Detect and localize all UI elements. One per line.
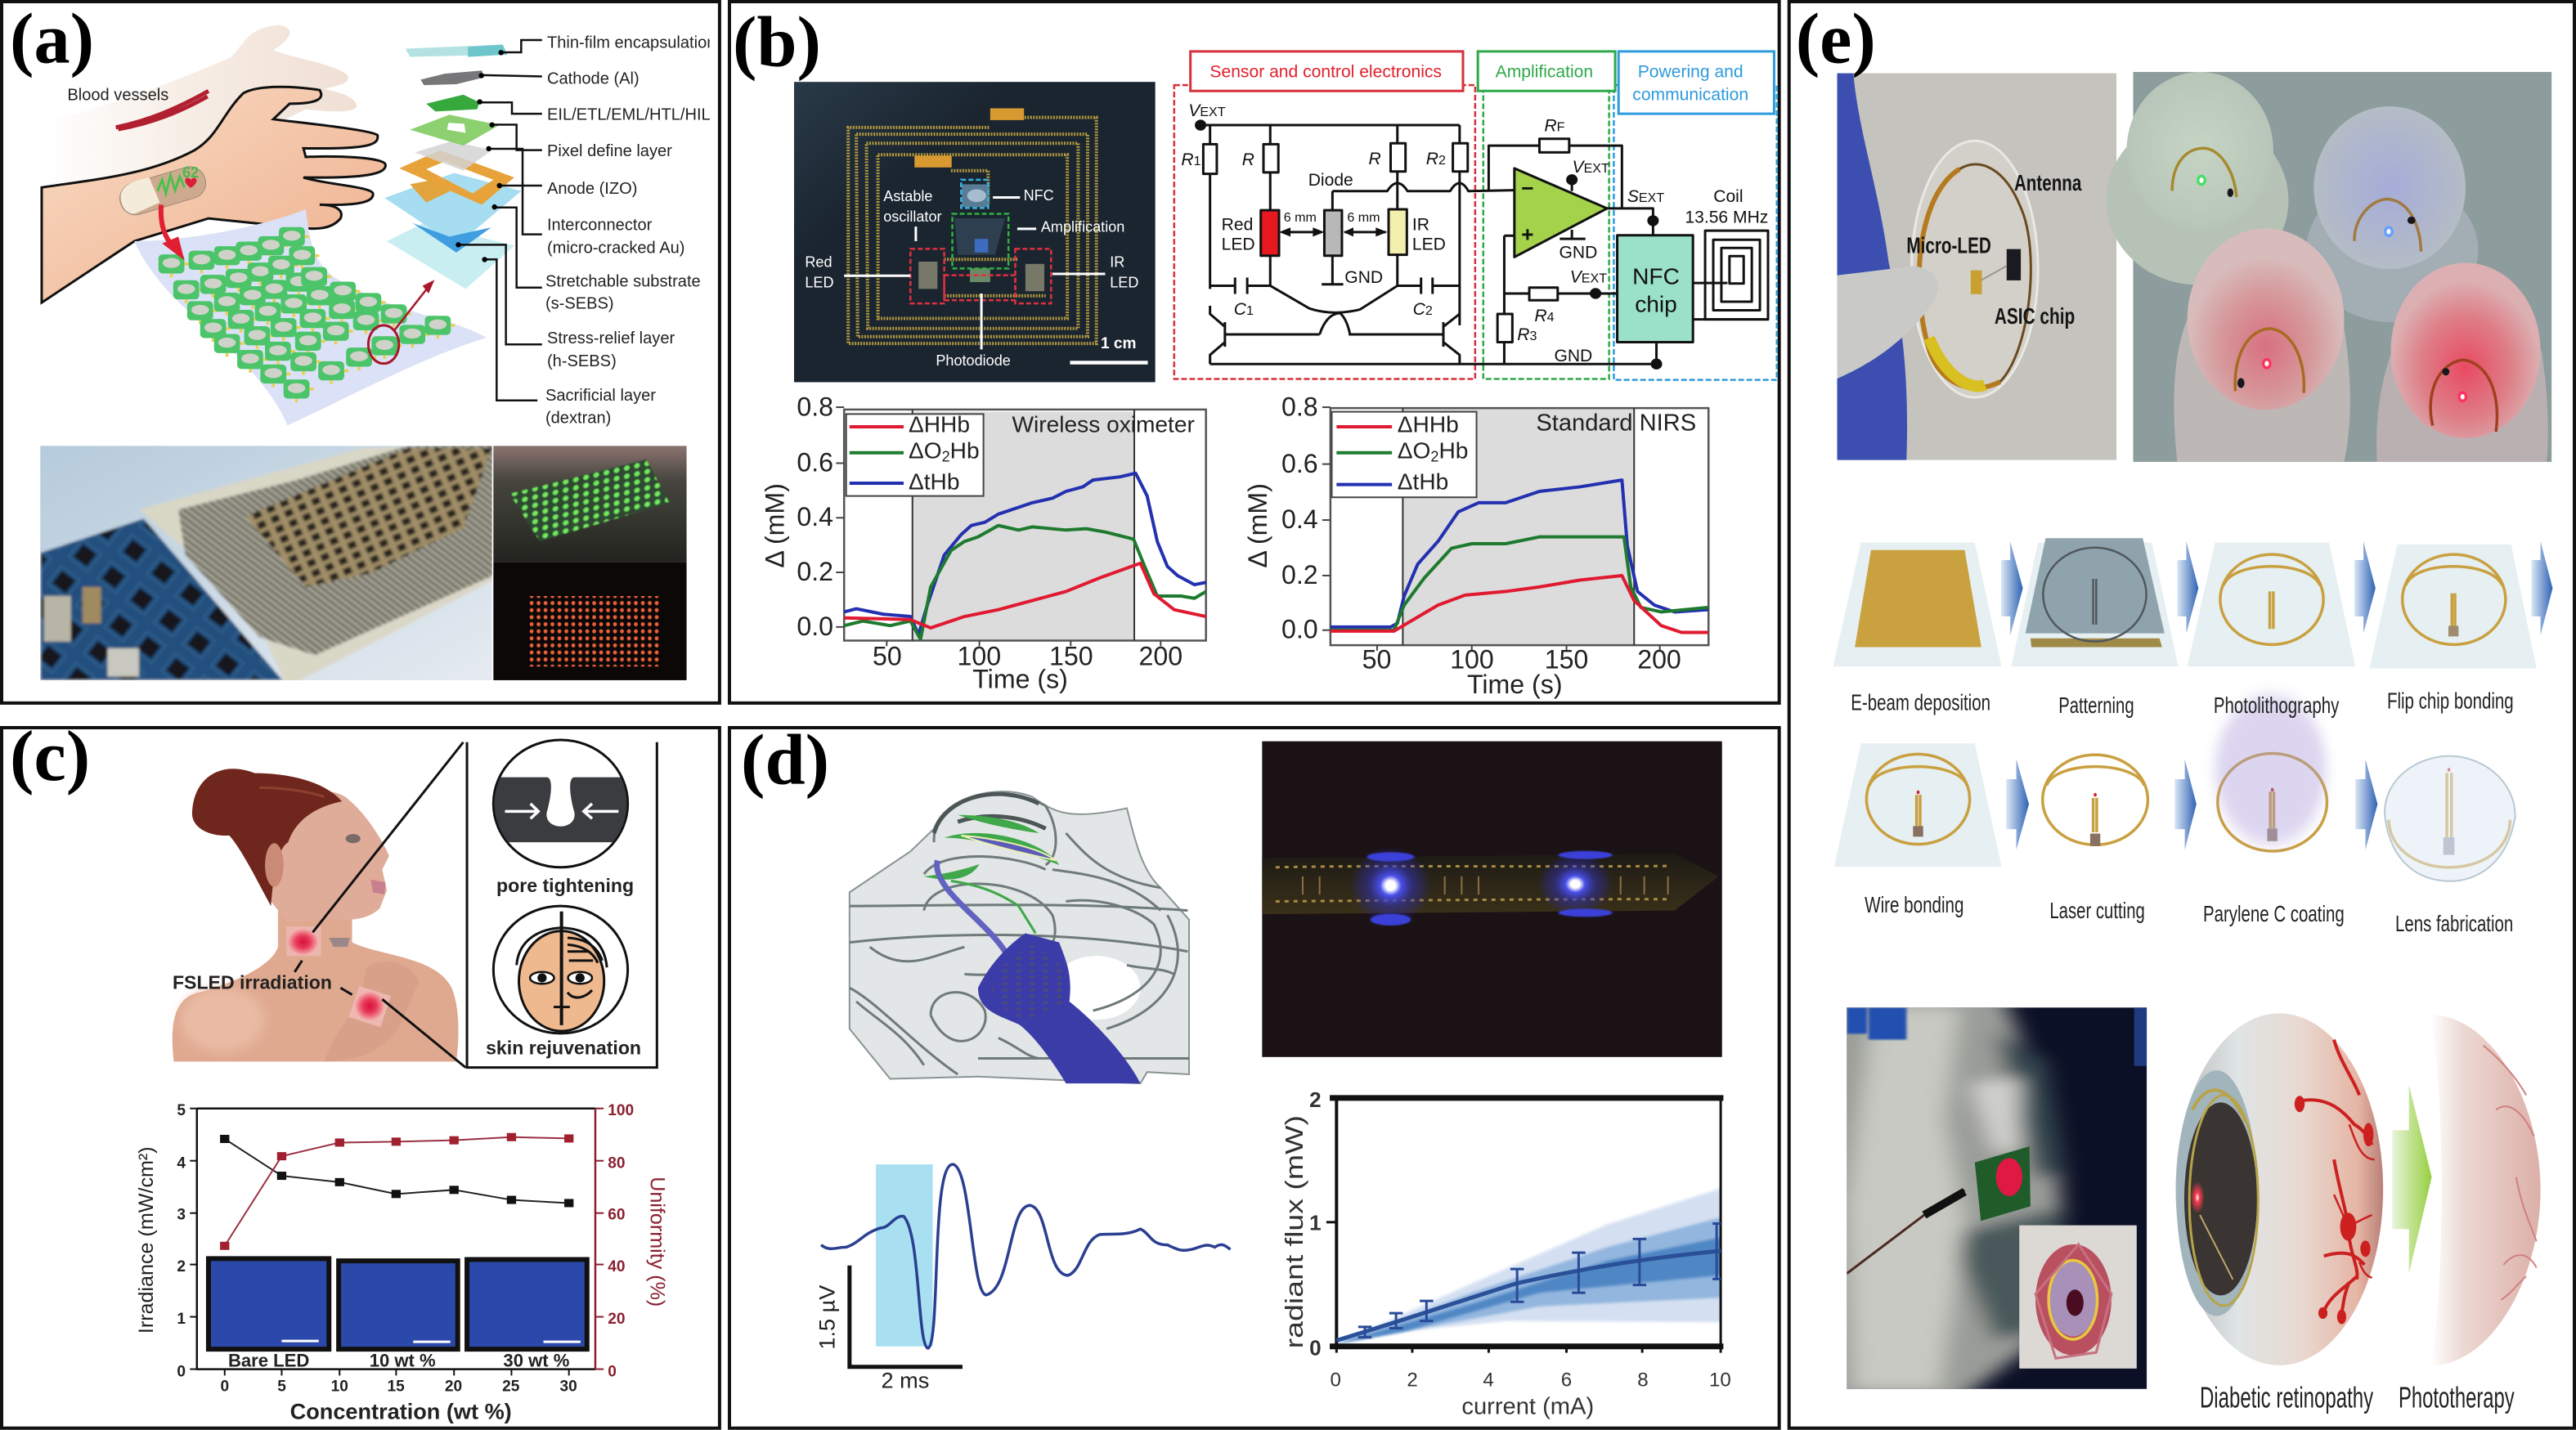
radiant flux labels: 1 <box>1309 1211 1322 1235</box>
section headers <box>1191 52 1774 114</box>
panel d artwork <box>821 742 1729 1367</box>
right chart labels: Time (s) <box>1467 670 1563 699</box>
panel c artwork <box>173 740 657 1375</box>
arrow to layer stack <box>395 280 434 329</box>
photo labels: Amplification <box>1041 218 1124 235</box>
auditory nerve <box>978 933 1140 1083</box>
eye labels: Phototherapy <box>2399 1381 2515 1414</box>
photo callouts: Antenna <box>2014 170 2082 195</box>
circuit labels: VEXT <box>1188 101 1226 120</box>
green therapy arrow <box>2392 1085 2432 1274</box>
lens on tweezers photo <box>1838 74 2116 460</box>
eye: diabetic retinopathy <box>2175 1013 2383 1365</box>
chart labels: 15 <box>388 1378 405 1396</box>
process step labels: Photolithography <box>2214 693 2339 718</box>
LED cell grid <box>159 227 455 402</box>
labels: layer stack: Thin-film encapsulation <box>547 34 716 52</box>
circuit labels: RF <box>1544 117 1565 136</box>
circuit labels: R <box>1242 150 1254 169</box>
labels: layer stack: (h-SEBS) <box>547 352 617 370</box>
right chart labels: 0.8 <box>1281 392 1318 421</box>
right chart labels: 0.0 <box>1281 615 1318 644</box>
left chart labels: 200 <box>1139 642 1183 671</box>
step 2: patterning mask <box>2026 538 2165 647</box>
chart labels: Uniformity (%) <box>646 1177 669 1307</box>
circuit labels: SEXT <box>1627 187 1664 206</box>
eye labels: Diabetic retinopathy <box>2200 1381 2373 1414</box>
left chart labels: 0.8 <box>797 392 833 421</box>
circuit diagram <box>1200 125 1768 364</box>
circuit labels: chip <box>1635 292 1677 317</box>
icon and figure labels: skin rejuvenation <box>486 1038 641 1059</box>
circuit labels: R2 <box>1426 150 1446 168</box>
process step labels: Wire bonding <box>1865 892 1963 917</box>
circuit labels: Coil <box>1713 187 1744 206</box>
panel: (b) wireless oximeter <box>729 2 1779 703</box>
chart labels: 30 <box>559 1378 577 1396</box>
left oximeter chart <box>836 407 1206 646</box>
left chart labels: 2 <box>942 449 950 465</box>
junction dots <box>1195 119 1663 370</box>
woman figure <box>173 769 459 1061</box>
photo labels: Astable <box>883 188 933 204</box>
radiant flux labels: 2 <box>1309 1087 1322 1112</box>
section header labels: Amplification <box>1496 62 1593 81</box>
rabbit photo <box>1847 1007 2147 1389</box>
irradiation patches <box>286 926 391 1027</box>
right chart labels: ΔtHb <box>1398 469 1448 495</box>
section header labels <box>1209 62 1748 105</box>
blood vessels <box>116 91 209 129</box>
chart labels: 60 <box>608 1207 626 1224</box>
circuit labels: 6 mm <box>1284 210 1317 225</box>
chart labels: 10 <box>331 1378 348 1396</box>
callout leaders and bracket <box>294 742 657 1068</box>
icon and figure labels <box>173 875 641 1059</box>
four colored lens cups photo <box>2107 72 2551 462</box>
circuit labels: R1 <box>1181 150 1201 169</box>
panel letter e: (e) <box>1796 0 1876 78</box>
gold antenna rings for steps 3-8 <box>1866 554 2510 867</box>
circuit labels: + <box>1521 222 1534 246</box>
labels: layer stack: Interconnector <box>547 216 653 234</box>
chart labels: 80 <box>608 1154 626 1172</box>
chart labels: 5 <box>277 1378 286 1396</box>
section header labels: communication <box>1632 86 1748 105</box>
chart labels: 4 <box>177 1154 186 1172</box>
chart labels: 1 <box>177 1311 186 1328</box>
labels: layer stack: Anode (IZO) <box>547 180 637 198</box>
circuit labels: − <box>1521 176 1534 200</box>
process step platforms <box>1833 543 2537 867</box>
stress relief layer <box>412 223 491 253</box>
left chart labels: 0.6 <box>797 448 833 477</box>
panel e frame <box>1789 2 2574 1428</box>
process arrows <box>2001 541 2552 849</box>
radiant flux chart <box>1326 1098 1729 1353</box>
right chart labels <box>1243 392 1696 699</box>
circuit labels <box>1181 101 1768 365</box>
chart labels: Irradiance (mW/cm²) <box>135 1146 158 1334</box>
chart labels: 5 <box>177 1102 186 1119</box>
panel: (d) cochlear optogenetics <box>729 719 1779 1428</box>
circuit labels: R4 <box>1534 307 1555 325</box>
right chart labels: 50 <box>1362 645 1391 675</box>
photo labels: NFC <box>1024 187 1054 204</box>
emissive layer <box>426 95 479 111</box>
section header labels: Sensor and control electronics <box>1209 62 1442 81</box>
photo callouts: Micro-LED <box>1906 232 1991 258</box>
circuit labels: NFC <box>1632 264 1680 289</box>
right chart labels: 0.4 <box>1281 504 1318 534</box>
left chart labels: 0.2 <box>797 557 833 586</box>
labels: layer stack: Pixel define layer <box>547 142 672 160</box>
process step labels: Patterning <box>2058 693 2134 718</box>
circuit labels: 6 mm <box>1347 210 1380 225</box>
photo labels: Red <box>805 254 832 271</box>
panel a artwork: hand, array and layer stack <box>33 25 687 687</box>
circuit labels: VEXT <box>1573 158 1609 177</box>
circuit labels: 13.56 MHz <box>1685 208 1768 227</box>
chart labels: 0 <box>177 1363 186 1380</box>
radiant flux labels: 4 <box>1483 1369 1494 1392</box>
right chart labels: 150 <box>1545 645 1588 675</box>
process step labels: Parylene C coating <box>2203 901 2345 926</box>
labels: layer stack: Stress-relief layer <box>547 329 675 347</box>
chart labels: Bare LED <box>228 1350 309 1370</box>
process step labels: Flip chip bonding <box>2387 688 2514 713</box>
faded arm <box>42 25 357 187</box>
labels: layer stack: (dextran) <box>545 409 611 427</box>
chart labels <box>135 1102 669 1424</box>
left chart labels: 0.0 <box>797 612 833 641</box>
chart labels: 20 <box>445 1378 462 1396</box>
chart labels: 40 <box>608 1258 626 1275</box>
chart labels: 20 <box>608 1311 626 1328</box>
anode frame <box>399 150 514 204</box>
section header labels: Powering and <box>1638 62 1744 81</box>
irradiance and uniformity chart <box>190 1109 604 1375</box>
panel: (a) stretchable LED skin display <box>2 0 720 703</box>
circuit labels: Diode <box>1308 171 1353 190</box>
photo labels <box>805 187 1138 369</box>
photo callouts: ASIC chip <box>1995 303 2075 329</box>
label blood vessels: Blood vessels <box>67 87 168 105</box>
red lit array photo <box>493 562 687 680</box>
left chart labels: 50 <box>873 642 902 671</box>
waveform scale labels: 1.5 µV <box>815 1285 840 1350</box>
circuit labels: GND <box>1554 347 1592 365</box>
chips and LEDs on rings <box>1913 625 2458 855</box>
photo labels: oscillator <box>883 208 942 225</box>
radiant flux labels: 10 <box>1709 1369 1731 1392</box>
labels: layer stack: EIL/ETL/EML/HTL/HIL <box>547 106 711 124</box>
process step labels: Laser cutting <box>2049 898 2145 923</box>
left chart labels: ΔO <box>909 438 942 464</box>
labels: layer stack: Cathode (Al) <box>547 69 640 87</box>
photo labels: IR <box>1110 254 1124 271</box>
thin-film encapsulation <box>406 45 507 57</box>
chart labels: 100 <box>608 1102 634 1119</box>
red arrow from patch <box>161 204 184 260</box>
radiant flux labels: 0 <box>1331 1369 1341 1392</box>
chart labels: 3 <box>177 1207 186 1224</box>
right chart labels: 100 <box>1450 645 1494 675</box>
evoked response waveform <box>821 1164 1230 1348</box>
circuit labels: Red <box>1222 215 1253 234</box>
radiant flux labels: 8 <box>1637 1369 1649 1392</box>
leader lines <box>459 40 542 401</box>
panel c frame <box>2 728 720 1428</box>
interconnector layer <box>415 141 492 171</box>
circuit labels: LED <box>1222 235 1255 253</box>
right chart labels: 2 <box>1430 449 1438 465</box>
photo labels: LED <box>805 275 834 291</box>
rabbit eye inset <box>2019 1226 2137 1369</box>
panel d frame <box>729 728 1779 1428</box>
small anode <box>410 180 451 203</box>
panel letter b: (b) <box>733 2 821 82</box>
scale bars <box>850 1266 963 1367</box>
circuit labels: GND <box>1344 268 1383 287</box>
stretchable substrate <box>384 173 521 246</box>
probe photo <box>1262 742 1722 1057</box>
chart labels: 0 <box>608 1363 617 1380</box>
cathode <box>420 70 484 85</box>
labels: layer stack <box>545 34 716 427</box>
radiant flux labels: 2 <box>1407 1369 1418 1392</box>
labels: layer stack: (s-SEBS) <box>545 295 614 313</box>
cochlea 3D rendering <box>850 791 1189 1083</box>
icon: pore tightening <box>491 740 630 867</box>
panel letter d: (d) <box>741 719 829 800</box>
chart labels: 0 <box>221 1378 229 1396</box>
photo labels: Photodiode <box>936 352 1011 369</box>
process step labels: E-beam deposition <box>1851 690 1990 715</box>
process step labels <box>1851 688 2514 936</box>
right NIRS chart <box>1322 407 1708 651</box>
panel: (c) FSLED skin phototherapy <box>2 716 720 1428</box>
step 1: e-beam gold film <box>1855 550 1981 647</box>
panel letter a: (a) <box>10 0 94 78</box>
left chart labels: Δ (mM) <box>760 483 789 568</box>
labels: layer stack: (micro-cracked Au) <box>547 239 684 257</box>
labels: layer stack: Sacrificial layer <box>545 387 656 405</box>
flexible LED array sheet <box>134 209 487 425</box>
upper and process artwork <box>1833 72 2552 881</box>
icon: skin rejuvenation <box>493 906 628 1033</box>
radiant flux labels: 0 <box>1309 1335 1322 1360</box>
radiant flux labels: 6 <box>1561 1369 1572 1392</box>
left chart labels: 0.4 <box>797 502 833 531</box>
circuit labels: LED <box>1412 235 1446 253</box>
panel a frame <box>2 2 720 703</box>
circuit labels: C2 <box>1413 300 1433 319</box>
chart labels: 2 <box>177 1258 186 1275</box>
panel: (e) smart contact lens <box>1789 0 2574 1428</box>
circuit labels: R <box>1368 150 1381 168</box>
circuit labels: R3 <box>1517 325 1537 344</box>
left chart labels: Wireless oximeter <box>1012 411 1195 437</box>
left chart labels: Time (s) <box>972 665 1068 694</box>
panel b frame <box>729 2 1779 703</box>
blue emission insets <box>209 1258 587 1349</box>
chart labels: 10 wt % <box>370 1350 436 1370</box>
photo labels: 1 cm <box>1101 335 1136 352</box>
radiant flux labels <box>1281 1087 1731 1420</box>
right chart labels: 0.2 <box>1281 560 1318 589</box>
left chart labels: 100 <box>958 642 1001 671</box>
photo labels: LED <box>1110 275 1138 291</box>
right chart labels: Δ (mM) <box>1243 483 1272 568</box>
waveform scale labels <box>815 1285 929 1393</box>
right chart labels: 0.6 <box>1281 449 1318 478</box>
right chart labels: Hb <box>1438 438 1468 464</box>
red selection circle <box>368 325 399 364</box>
circuit section frames <box>1174 85 1777 380</box>
icon and figure labels: FSLED irradiation <box>173 971 332 993</box>
left chart labels: Hb <box>950 438 980 464</box>
parylene cloud <box>2215 695 2327 845</box>
circuit labels: IR <box>1412 215 1429 234</box>
circuit labels: GND <box>1559 243 1597 262</box>
waveform scale labels: 2 ms <box>882 1368 929 1393</box>
chart labels: 25 <box>502 1378 520 1396</box>
right chart labels: ΔO <box>1398 438 1430 464</box>
left chart labels: ΔtHb <box>909 469 959 495</box>
icon and figure labels: pore tightening <box>496 875 634 896</box>
chart labels: Concentration (wt %) <box>290 1399 512 1424</box>
patch reading: 62 <box>182 164 199 181</box>
leader dots <box>456 50 504 262</box>
process step labels: Lens fabrication <box>2395 911 2513 936</box>
left chart labels: 150 <box>1049 642 1093 671</box>
right chart labels: Standard NIRS <box>1536 410 1696 436</box>
sacrificial layer <box>387 223 514 289</box>
right chart labels: 200 <box>1637 645 1681 675</box>
panel b artwork <box>794 52 1777 651</box>
photo callouts <box>1906 170 2082 329</box>
left chart labels <box>760 392 1195 694</box>
radiant flux labels: radiant flux (mW) <box>1281 1115 1308 1348</box>
labels: layer stack: Stretchable substrate <box>545 273 701 291</box>
pixel define layer <box>410 114 500 146</box>
circuit labels: VEXT <box>1570 268 1607 287</box>
panel letter c: (c) <box>10 716 90 796</box>
green lit array photo <box>493 446 687 562</box>
lower artwork <box>1847 1007 2541 1389</box>
left chart labels: ΔHHb <box>909 411 970 437</box>
bottom photo: flexible display on PCB <box>33 439 500 687</box>
right chart labels: ΔHHb <box>1398 411 1459 437</box>
device photo <box>794 82 1156 382</box>
colored hand <box>42 87 385 303</box>
lens dome <box>2385 756 2515 881</box>
chart labels: 30 wt % <box>503 1350 570 1370</box>
radiant flux labels: current (mA) <box>1461 1394 1594 1420</box>
circuit labels: C1 <box>1234 300 1254 319</box>
device patch on wrist <box>116 163 209 218</box>
eye: after phototherapy <box>2430 1015 2541 1365</box>
